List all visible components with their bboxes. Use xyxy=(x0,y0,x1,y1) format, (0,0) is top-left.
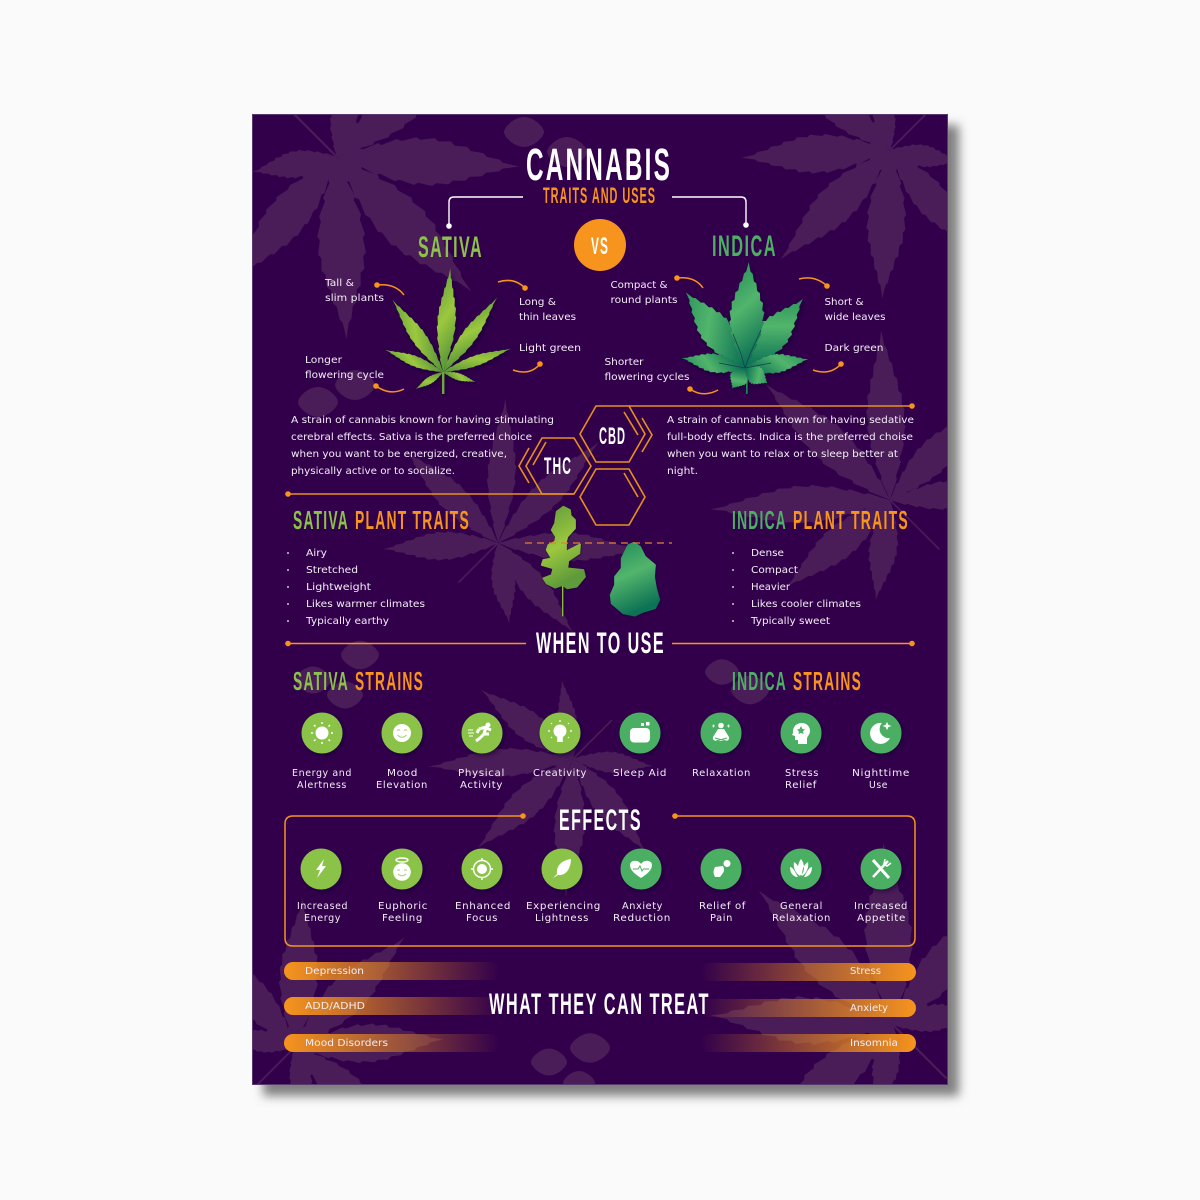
card shadow xyxy=(263,125,959,1096)
icon: physical activity xyxy=(462,712,502,754)
bar: mood disorders xyxy=(284,1034,500,1052)
hexagon: THC: THC xyxy=(544,453,572,480)
background leaf pattern xyxy=(253,115,947,1084)
icon: increased appetite xyxy=(860,848,902,890)
bar: mood disorders: Mood Disorders xyxy=(305,1038,388,1049)
label: physical activity xyxy=(458,768,505,791)
callouts: indica traits: flowering cycles xyxy=(604,372,690,383)
icon: experiencing lightness xyxy=(542,848,582,890)
label: general relaxation: General xyxy=(780,901,823,912)
icon: relaxation xyxy=(700,712,742,754)
bar: stress xyxy=(700,963,916,981)
bar: insomnia xyxy=(700,1034,916,1052)
label: euphoric feeling xyxy=(378,901,428,924)
bar: insomnia: Insomnia xyxy=(850,1038,898,1049)
list: indica plant traits: Compact xyxy=(751,565,798,576)
heading: indica: INDICA xyxy=(712,230,777,263)
heading: effects: EFFECTS xyxy=(559,804,642,837)
connector: to sativa xyxy=(446,197,523,229)
bar: anxiety: Anxiety xyxy=(850,1003,888,1014)
hexagon: CBD: CBD xyxy=(599,423,626,450)
callouts: sativa traits: Longer xyxy=(305,355,343,366)
illustration: indica bud xyxy=(611,543,659,616)
callouts: indica traits: wide leaves xyxy=(824,312,886,323)
heading: sativa plant traits xyxy=(293,505,470,535)
text block: indica description: when you want to relax or to sleep better at xyxy=(667,449,898,460)
label: stress relief xyxy=(785,768,819,791)
text block: sativa description xyxy=(291,415,554,477)
text block: sativa description: A strain of cannabis known for having stimulating xyxy=(291,415,554,426)
callouts: indica traits: Shorter xyxy=(604,357,644,368)
icon: euphoric feeling xyxy=(382,848,422,890)
callouts: indica traits: Short & xyxy=(824,297,864,308)
list: sativa plant traits: Likes warmer climates xyxy=(306,599,425,610)
callouts: sativa traits: thin leaves xyxy=(519,312,576,323)
label: general relaxation xyxy=(772,901,831,924)
dashed divider xyxy=(525,542,672,544)
illustration: indica leaf xyxy=(673,261,815,394)
heading: indica strains: INDICA xyxy=(732,666,787,696)
heading: indica plant traits: INDICA xyxy=(732,505,787,535)
text block: indica description xyxy=(667,415,914,477)
callouts: sativa traits: Tall & xyxy=(324,278,354,289)
panel: poster background xyxy=(252,114,948,1084)
text block: indica description: night. xyxy=(667,466,698,477)
bar: add/adhd: ADD/ADHD xyxy=(305,1001,365,1012)
label: increased energy xyxy=(297,901,348,924)
label: experiencing lightness: Lightness xyxy=(535,913,589,924)
callouts: indica traits xyxy=(604,280,886,383)
callouts: indica traits: round plants xyxy=(610,295,678,306)
icon: general relaxation xyxy=(780,848,822,890)
label: mood elevation: Elevation xyxy=(376,780,428,791)
heading: when to use: WHEN TO USE xyxy=(536,627,665,660)
label: physical activity: Activity xyxy=(460,780,503,791)
label: anxiety reduction: Reduction xyxy=(613,913,671,924)
heading: what they can treat: WHAT THEY CAN TREAT xyxy=(489,988,710,1021)
list: sativa plant traits: Typically earthy xyxy=(305,616,389,627)
icon: stress relief xyxy=(780,712,822,754)
label: creativity: Creativity xyxy=(533,768,587,779)
label: enhanced focus: Focus xyxy=(466,913,498,924)
bar: anxiety xyxy=(700,999,916,1017)
icon: sleep aid xyxy=(620,712,660,754)
label: increased appetite xyxy=(854,901,908,924)
bar: stress: Stress xyxy=(850,966,881,977)
illustration: sativa bud xyxy=(542,507,585,616)
icon: energy and alertness xyxy=(302,712,342,754)
callouts: sativa traits: slim plants xyxy=(325,293,384,304)
icon: anxiety reduction xyxy=(620,848,662,890)
icon: nighttime use xyxy=(860,712,902,754)
label: anxiety reduction: Anxiety xyxy=(622,901,663,912)
icon: increased energy xyxy=(300,848,342,890)
callouts: indica traits: Compact & xyxy=(610,280,668,291)
icon: mood elevation xyxy=(382,712,422,754)
list: indica plant traits: Heavier xyxy=(751,582,791,593)
heading: indica plant traits xyxy=(732,505,909,535)
text block: sativa description: physically active or to socialize. xyxy=(291,466,455,477)
heading: sativa: SATIVA xyxy=(418,231,483,264)
icon: creativity xyxy=(540,712,580,754)
label: experiencing lightness xyxy=(526,901,601,924)
callouts: sativa traits: Long & xyxy=(519,297,556,308)
label: nighttime use: Use xyxy=(869,780,888,791)
rule: when to use left xyxy=(285,641,526,646)
icon: enhanced focus xyxy=(462,848,502,890)
callouts: sativa traits xyxy=(305,278,581,381)
label: nighttime use xyxy=(852,768,910,791)
rule: when to use right xyxy=(672,641,915,646)
label: increased energy: Energy xyxy=(304,913,341,924)
text block: sativa description: cerebral effects. Sativa is the preferred choice xyxy=(291,432,532,443)
hexagon: CBD xyxy=(580,403,915,462)
callouts: sativa traits: Light green xyxy=(519,343,581,354)
list: indica plant traits: Typically sweet xyxy=(750,616,830,627)
text: TRAITS AND USES xyxy=(543,183,656,208)
label: relief of pain: Pain xyxy=(710,913,733,924)
label: relief of pain xyxy=(699,901,746,924)
label: anxiety reduction xyxy=(613,901,671,924)
bar: depression xyxy=(284,962,500,980)
heading: indica plant traits: PLANT TRAITS xyxy=(793,505,909,535)
label: stress relief: Relief xyxy=(785,780,817,791)
label: physical activity: Physical xyxy=(458,768,505,779)
text block: sativa description: when you want to be energized, creative, xyxy=(291,449,507,460)
heading: sativa strains: SATIVA xyxy=(293,666,349,696)
list: sativa plant traits: Lightweight xyxy=(306,582,371,593)
list: indica plant traits: Dense xyxy=(751,548,784,559)
text block: indica description: A strain of cannabis known for having sedative xyxy=(667,415,914,426)
label: energy and alertness: Energy and xyxy=(292,768,352,779)
callout arrows xyxy=(373,275,844,394)
bar: depression: Depression xyxy=(305,966,364,977)
title: CANNABIS xyxy=(526,139,672,190)
heading: sativa strains: STRAINS xyxy=(355,666,424,696)
hexagon: THC xyxy=(285,438,591,497)
list: sativa plant traits xyxy=(287,548,425,627)
hexagon: empty xyxy=(580,469,645,525)
list: sativa plant traits: Airy xyxy=(306,548,327,559)
heading: sativa plant traits: SATIVA xyxy=(293,505,349,535)
label: experiencing lightness: Experiencing xyxy=(526,901,601,912)
label: mood elevation: Mood xyxy=(387,768,418,779)
label: general relaxation: Relaxation xyxy=(772,913,831,924)
icon: relief of pain xyxy=(700,848,742,890)
label: stress relief: Stress xyxy=(785,768,819,779)
list: indica plant traits xyxy=(732,548,861,627)
label: enhanced focus: Enhanced xyxy=(455,901,511,912)
label: relief of pain: Relief of xyxy=(699,901,746,912)
label: enhanced focus xyxy=(455,901,511,924)
callouts: indica traits: Dark green xyxy=(824,343,884,354)
label: mood elevation xyxy=(376,768,428,791)
label: increased appetite: Appetite xyxy=(857,913,906,924)
callouts: sativa traits: flowering cycle xyxy=(305,370,384,381)
VS badge: VS xyxy=(591,233,609,260)
label: euphoric feeling: Feeling xyxy=(382,913,423,924)
label: increased appetite: Increased xyxy=(854,901,908,912)
label: euphoric feeling: Euphoric xyxy=(378,901,428,912)
label: energy and alertness: Alertness xyxy=(297,780,347,791)
list: indica plant traits: Likes cooler climates xyxy=(751,599,861,610)
heading: sativa plant traits: PLANT TRAITS xyxy=(355,505,470,535)
heading: indica strains: STRAINS xyxy=(793,666,862,696)
VS badge xyxy=(574,219,626,271)
label: sleep aid: Sleep Aid xyxy=(613,768,667,779)
connector: to indica xyxy=(672,197,749,228)
panel: effects frame xyxy=(285,813,915,946)
label: increased energy: Increased xyxy=(297,901,348,912)
label: relaxation: Relaxation xyxy=(692,768,751,779)
bar: add/adhd xyxy=(284,997,500,1015)
list: sativa plant traits: Stretched xyxy=(306,565,358,576)
label: nighttime use: Nighttime xyxy=(852,768,910,779)
label: energy and alertness xyxy=(292,768,352,791)
illustration: sativa leaf xyxy=(383,268,513,394)
text block: indica description: full-body effects. Indica is the preferred choise xyxy=(667,432,913,443)
